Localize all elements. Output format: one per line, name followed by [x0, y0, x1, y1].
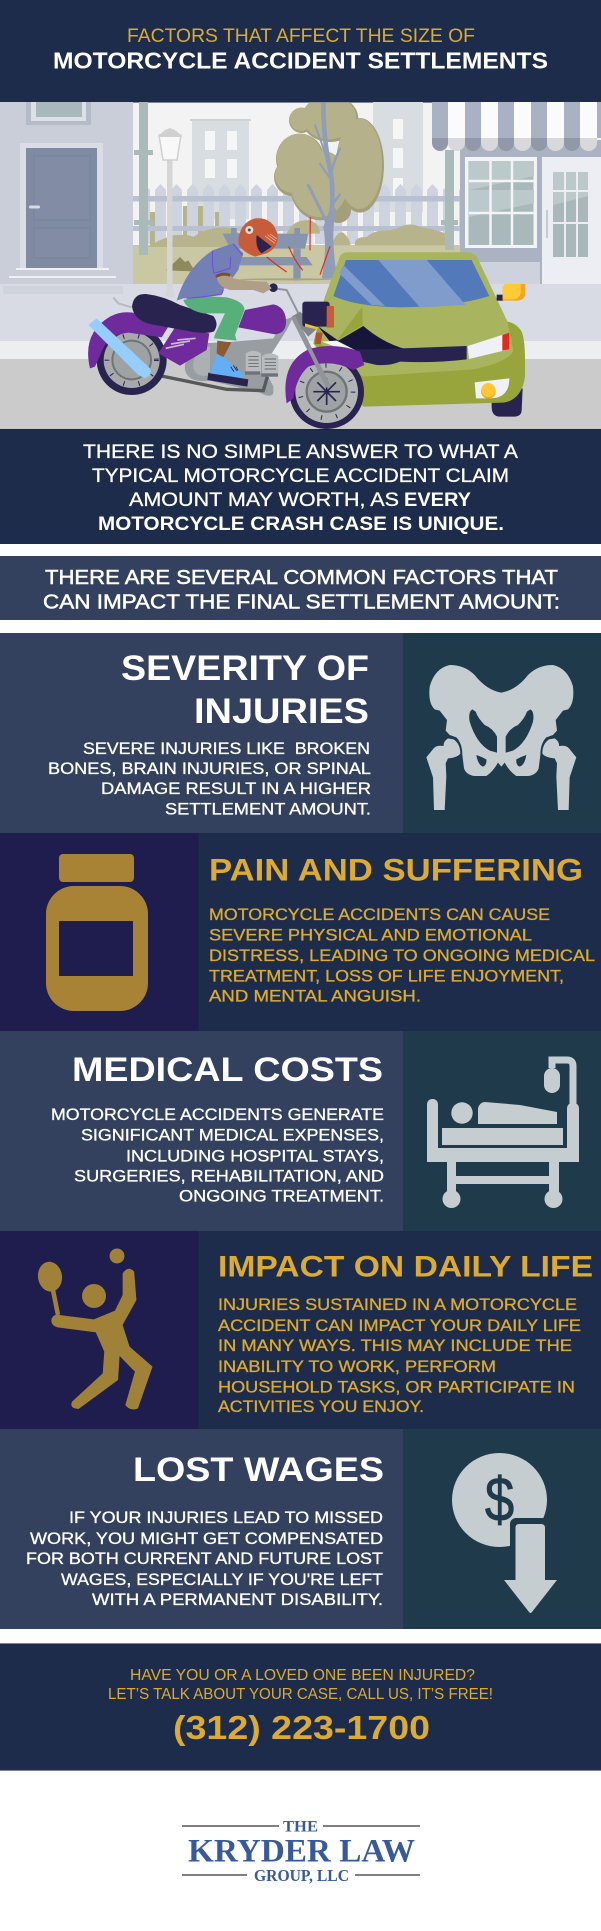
- subheading panel: THERE ARE SEVERAL COMMON FACTORS THAT: [45, 566, 559, 589]
- icon: pill bottle: [46, 854, 148, 1011]
- left building with door: [0, 102, 133, 286]
- phone number: (312) 223-1700: [173, 1709, 430, 1746]
- engine and frame: [152, 317, 293, 396]
- panel: lost wages: [0, 1429, 601, 1629]
- windshield: [333, 260, 489, 307]
- body text: INABILITY TO WORK, PERFORM: [218, 1358, 496, 1376]
- body text: INJURIES SUSTAINED IN A MOTORCYCLE: [218, 1296, 577, 1314]
- heading: PAIN AND SUFFERING: [209, 852, 583, 888]
- fuel tank: [238, 304, 286, 334]
- call to action text: [108, 1667, 493, 1703]
- heading: [121, 649, 369, 731]
- icon: dollar coin with down arrow: [452, 1453, 557, 1613]
- logo: The Kryder Law Group, LLC: KRYDER LAW: [188, 1834, 415, 1870]
- body text: BONES, BRAIN INJURIES, OR SPINAL: [48, 760, 371, 778]
- title banner: [0, 0, 601, 102]
- headlight: [468, 333, 509, 359]
- shop door: [542, 157, 601, 284]
- background buildings: [190, 102, 423, 219]
- body text: WITH A PERMANENT DISABILITY.: [92, 1591, 383, 1609]
- body text: WAGES, ESPECIALLY IF YOU'RE LEFT: [61, 1571, 383, 1589]
- body text: MOTORCYCLE ACCIDENTS GENERATE: [51, 1106, 384, 1124]
- door: [26, 148, 97, 268]
- body text: SIGNIFICANT MEDICAL EXPENSES,: [81, 1127, 384, 1145]
- logo: The Kryder Law Group, LLC: THE: [283, 1819, 318, 1836]
- subheading panel: [0, 556, 601, 620]
- body text: SURGERIES, REHABILITATION, AND: [74, 1167, 384, 1185]
- rear wheel: [97, 325, 167, 395]
- trousers: [183, 297, 244, 341]
- heading: MEDICAL COSTS: [72, 1051, 383, 1089]
- intro panel: [0, 429, 601, 544]
- body text: [209, 906, 595, 1005]
- body text: [26, 1509, 383, 1609]
- leg and shoe: [210, 341, 244, 378]
- body text: HOUSEHOLD TASKS, OR PARTICIPATE IN: [218, 1378, 575, 1396]
- body text: FOR BOTH CURRENT AND FUTURE LOST: [26, 1550, 383, 1568]
- icon: person playing tennis: [36, 1248, 153, 1409]
- intro panel: MOTORCYCLE CRASH CASE IS UNIQUE.: [98, 513, 504, 535]
- intro panel: THERE IS NO SIMPLE ANSWER TO WHAT A: [83, 441, 518, 463]
- panel: pain and suffering: [0, 833, 601, 1031]
- title line 2: MOTORCYCLE ACCIDENT SETTLEMENTS: [53, 48, 548, 74]
- panel: impact on daily life: [0, 1231, 601, 1429]
- heading: LOST WAGES: [133, 1451, 384, 1489]
- helmet: [238, 218, 278, 257]
- body text: DAMAGE RESULT IN A HIGHER: [101, 780, 371, 798]
- shop window: [465, 157, 537, 248]
- body text: INCLUDING HOSPITAL STAYS,: [126, 1147, 384, 1165]
- street lamp: [158, 128, 182, 297]
- bench: [223, 228, 313, 280]
- picket fence: [133, 184, 461, 244]
- side panel: [158, 327, 209, 366]
- call to action panel: [0, 1643, 601, 1771]
- front forks and handlebar: [269, 283, 334, 387]
- impact lines and motorcycle with rider: [88, 217, 364, 429]
- body text: DISTRESS, LEADING TO ONGOING MEDICAL: [209, 947, 595, 965]
- motorcycle: [88, 218, 364, 429]
- crumpled hood and bumper: [315, 326, 467, 365]
- panel: severity of injuries: [0, 633, 601, 833]
- heading: SEVERITY OF: [121, 649, 369, 688]
- front fender: [285, 346, 364, 403]
- awning: [432, 102, 601, 151]
- call to action text: LET’S TALK ABOUT YOUR CASE, CALL US, IT’S FREE!: [108, 1686, 493, 1703]
- call to action text: HAVE YOU OR A LOVED ONE BEEN INJURED?: [130, 1667, 475, 1684]
- side mirror: [497, 284, 525, 301]
- body text: ACTIVITIES YOU ENJOY.: [218, 1398, 424, 1416]
- seat: [132, 294, 217, 333]
- body text: SEVERE PHYSICAL AND EMOTIONAL: [209, 926, 532, 944]
- body text: AND MENTAL ANGUISH.: [209, 987, 421, 1005]
- car: [313, 252, 525, 417]
- subheading panel: CAN IMPACT THE FINAL SETTLEMENT AMOUNT:: [43, 591, 560, 614]
- logo: The Kryder Law Group, LLC: [182, 1819, 420, 1885]
- impact lines: [267, 217, 330, 275]
- tree, shrubs and bench: [148, 95, 445, 280]
- body text: SETTLEMENT AMOUNT.: [165, 801, 371, 819]
- icon: pelvis bones: [426, 665, 576, 810]
- rear fender: [88, 312, 168, 368]
- illustration: motorcycle crash street scene: [0, 95, 601, 429]
- blue bar: [88, 318, 151, 378]
- front wheel: [289, 354, 364, 429]
- heading: INJURIES: [194, 692, 369, 731]
- body text: ACCIDENT CAN IMPACT YOUR DAILY LIFE: [218, 1317, 581, 1335]
- intro panel: TYPICAL MOTORCYCLE ACCIDENT CLAIM: [92, 465, 509, 487]
- body text: [218, 1296, 581, 1416]
- body text: [48, 740, 371, 819]
- logo: The Kryder Law Group, LLC: GROUP, LLC: [254, 1866, 349, 1885]
- intro panel: AMOUNT MAY WORTH, AS: [129, 489, 399, 511]
- drainpipe: [134, 102, 153, 255]
- icon: hospital bed: [427, 1060, 579, 1208]
- body text: IF YOUR INJURIES LEAD TO MISSED: [69, 1509, 383, 1527]
- icon: dollar coin with down arrow: $: [485, 1466, 514, 1535]
- shirt: [177, 243, 243, 301]
- intro panel: EVERY: [404, 489, 471, 511]
- body text: [51, 1106, 384, 1205]
- shop front with awning: [432, 102, 601, 284]
- park ground and shrubs: [133, 206, 463, 285]
- heading: IMPACT ON DAILY LIFE: [218, 1251, 593, 1284]
- arm: [217, 273, 272, 293]
- rider: [177, 218, 278, 378]
- tree: [274, 95, 384, 279]
- body text: IN MANY WAYS. THIS MAY INCLUDE THE: [218, 1337, 572, 1355]
- title line 1: FACTORS THAT AFFECT THE SIZE OF: [127, 25, 475, 47]
- shop drainpipe: [441, 150, 458, 250]
- body text: ONGOING TREATMENT.: [179, 1187, 384, 1205]
- fog lamp: [475, 378, 509, 399]
- sidewalk and road: [0, 284, 601, 429]
- body text: SEVERE INJURIES LIKE BROKEN: [83, 740, 370, 758]
- body text: TREATMENT, LOSS OF LIFE ENJOYMENT,: [209, 967, 564, 985]
- body text: WORK, YOU MIGHT GET COMPENSATED: [30, 1530, 383, 1548]
- panel: medical costs: [0, 1031, 601, 1231]
- body text: MOTORCYCLE ACCIDENTS CAN CAUSE: [209, 906, 550, 924]
